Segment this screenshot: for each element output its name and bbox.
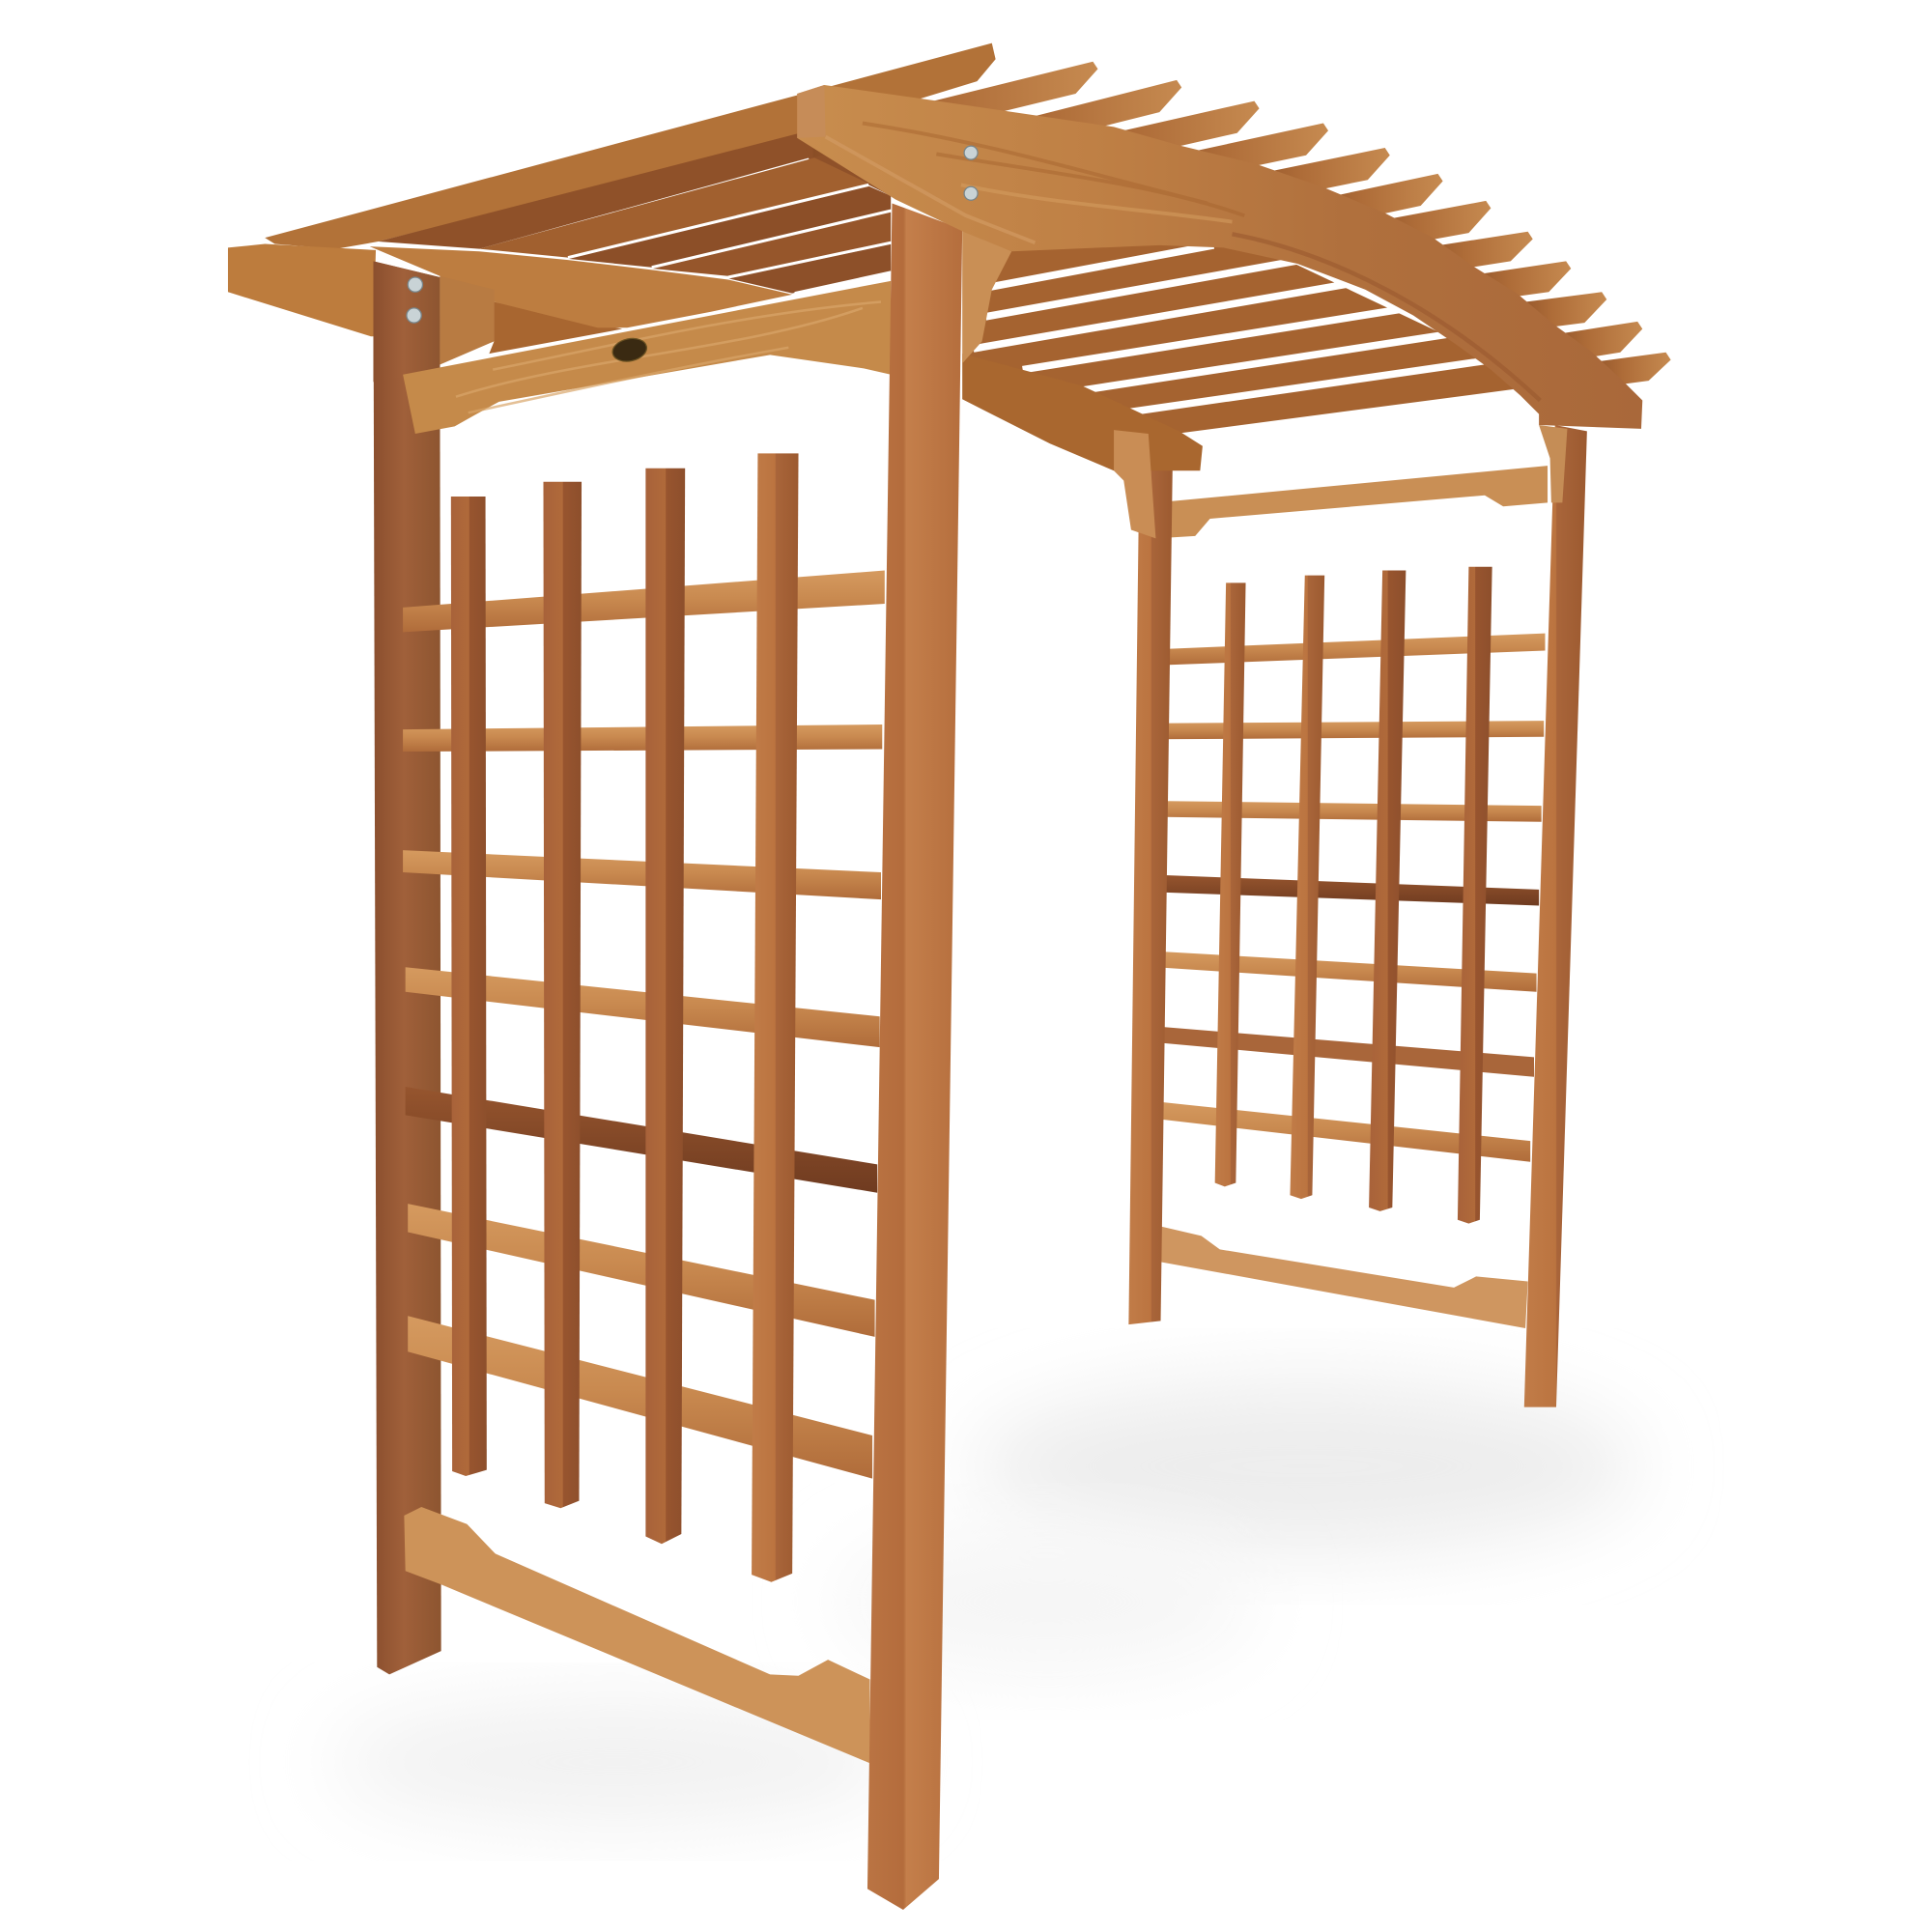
back right bracket	[1539, 425, 1567, 502]
back upper rail	[1155, 466, 1548, 538]
beam end and grain	[797, 85, 1540, 401]
front upper rail	[403, 281, 891, 434]
front trellis lattice	[403, 453, 885, 1582]
shaded backing behind beam corner	[795, 129, 906, 203]
front lattice horizontal rails	[403, 571, 885, 1479]
rear roof beam	[962, 354, 1203, 470]
top roof slat	[265, 43, 996, 249]
front lower rail	[404, 1507, 870, 1763]
roof slats left of front post	[379, 133, 891, 294]
back right post	[1524, 425, 1587, 1407]
slat overhangs	[813, 62, 1671, 389]
maker badge	[611, 335, 649, 364]
under-beam shadow piece	[489, 301, 622, 354]
back lattice horizontal rails	[1155, 634, 1545, 1162]
front right post	[867, 203, 962, 1910]
bolts	[407, 277, 423, 323]
rail grain	[456, 301, 881, 412]
side beam inner span	[370, 246, 792, 327]
side beam end	[228, 244, 376, 336]
roof side beam and bracket	[228, 244, 792, 382]
back lattice pickets	[1215, 567, 1492, 1224]
roof underside right of front post	[967, 234, 1518, 434]
rear beam bracket	[1114, 430, 1155, 538]
front post bracket	[962, 229, 1011, 363]
corner bracket	[440, 276, 494, 365]
ground shadows	[332, 1380, 1638, 1824]
post cap	[373, 261, 440, 382]
back trellis panel	[1128, 425, 1587, 1407]
front lattice pickets	[451, 453, 799, 1582]
roof slats	[265, 43, 1671, 434]
left front post	[373, 261, 441, 1674]
back left post	[1128, 431, 1173, 1324]
beam bolts	[964, 146, 978, 200]
back lower rail	[1146, 1224, 1528, 1328]
front arched roof beam	[797, 85, 1642, 429]
